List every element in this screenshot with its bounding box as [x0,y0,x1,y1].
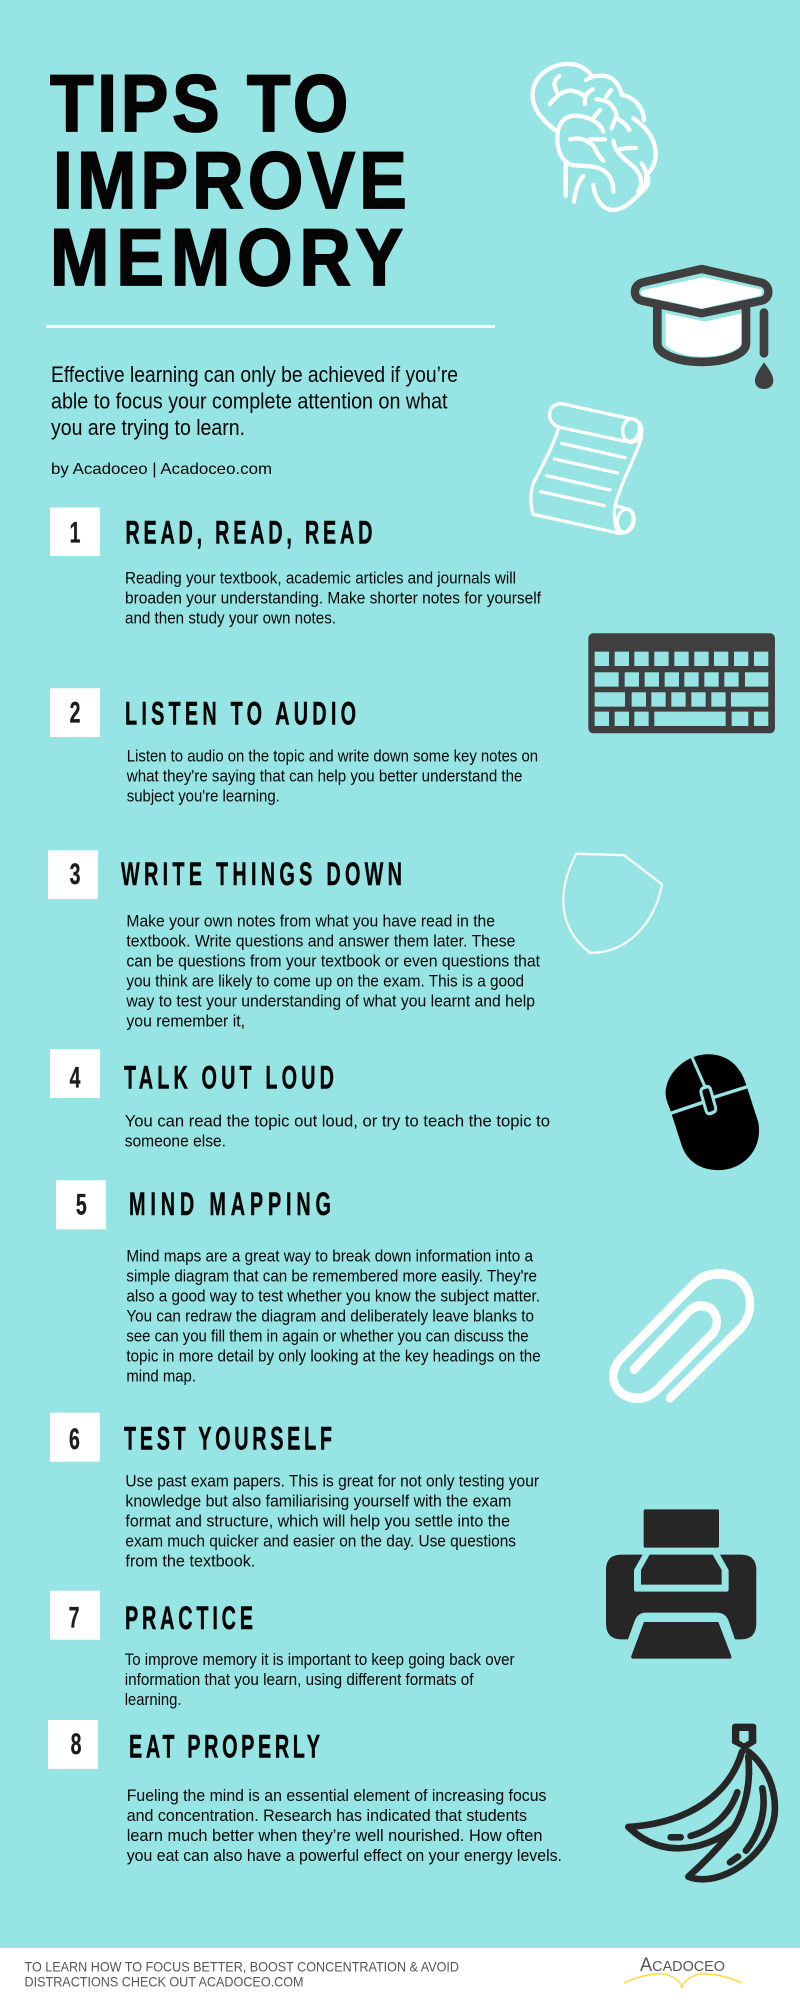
tip 8: eat properly: Fueling the mind is an essential element of increasing focus [127,1786,546,1805]
tip 4: talk out loud: You can read the topic out loud, or try to teach the topic to [125,1112,550,1131]
intro text: able to focus your complete attention on what [51,388,448,414]
tip 2: listen to audio [50,688,538,806]
tip 3: write things down: you think are likely to come up on the exam. This is a good [126,971,524,990]
tip 7: practice: learning. [125,1690,182,1709]
tip 1: read, read, read: broaden your understanding. Make shorter notes for yourself [125,588,541,607]
footer text: DISTRACTIONS CHECK OUT ACADOCEO.COM [24,1974,304,1990]
tip 6: test yourself: format and structure, which will help you settle into the [125,1512,510,1531]
tip 7: practice: To improve memory it is important to keep going back over [125,1650,515,1669]
tip 5: mind mapping: see can you fill them in again or whether you can discuss the [126,1327,529,1346]
tip 6: test yourself: exam much quicker and easier on the day. Use questions [125,1532,516,1551]
tip 1: read, read, read: 1 [70,517,80,550]
tip 4: talk out loud: 4 [70,1062,80,1095]
tip 1: read, read, read: Reading your textbook, academic articles and journals will [125,568,516,587]
tip 5: mind mapping [56,1180,541,1386]
tip 2: listen to audio: Listen to audio on the topic and write down some key notes on [127,747,538,766]
icon: bananas [628,1724,775,1879]
tip 8: eat properly: learn much better when they’re well nourished. How often [127,1826,542,1845]
icon: shield outline [563,854,662,953]
byline: by Acadoceo | Acadoceo.com [51,461,272,478]
tip 5: mind mapping: also a good way to test whether you know the subject matter. [126,1287,540,1306]
footer band [0,1948,800,2000]
tip 3: write things down: 3 [70,858,80,891]
icon: graduation cap [635,269,773,389]
tip 6: test yourself [50,1413,539,1571]
tip 3: write things down [48,850,540,1030]
tip 8: eat properly [48,1720,562,1865]
title: TIPS TO [50,59,348,149]
tip 3: write things down: way to test your understanding of what you learnt and help [125,991,535,1010]
intro text: you are trying to learn. [51,415,245,440]
title: IMPROVE [53,136,407,226]
tip 8: eat properly: 8 [71,1728,81,1761]
title: MEMORY [50,213,403,303]
title [50,59,407,303]
tip 2: listen to audio: what they're saying that can help you better understand the [126,767,522,786]
tip 2: listen to audio: 2 [70,697,80,730]
tip 6: test yourself: 6 [69,1423,80,1456]
footer text [24,1959,459,1990]
tip 1: read, read, read [50,508,541,627]
tip 6: test yourself: knowledge but also familiarising yourself with the exam [125,1492,511,1511]
tip 5: mind mapping: MIND MAPPING [129,1186,331,1222]
tip 8: eat properly: you eat can also have a powerful effect on your energy levels. [127,1846,562,1865]
tip 7: practice: PRACTICE [125,1600,253,1636]
tip 7: practice [50,1591,515,1709]
tip 5: mind mapping: simple diagram that can be remembered more easily. They're [126,1267,537,1286]
tip 7: practice: 7 [69,1601,79,1634]
tip 1: read, read, read: and then study your own notes. [125,608,336,627]
tip 8: eat properly: and concentration. Research has indicated that students [127,1806,527,1825]
logo: Acadoceo [624,1955,742,1988]
icon: keyboard [588,633,775,733]
tip 2: listen to audio: subject you're learning. [127,787,280,806]
tip 5: mind mapping: 5 [76,1188,87,1221]
tip 5: mind mapping: topic in more detail by only looking at the key headings on the [126,1347,541,1366]
icon: brain [533,64,656,210]
icon: computer mouse [666,1054,759,1170]
tip 4: talk out loud [50,1049,550,1151]
icon: paperclip [613,1274,750,1398]
tip 3: write things down: Make your own notes from what you have read in the [126,911,495,930]
tip 5: mind mapping: You can redraw the diagram and deliberately leave blanks to [126,1307,534,1326]
icon: paper scroll [531,404,642,534]
intro text [51,362,458,440]
tip 4: talk out loud: TALK OUT LOUD [124,1060,334,1096]
tip 4: talk out loud: someone else. [125,1132,226,1151]
tip 6: test yourself: from the textbook. [125,1552,255,1571]
tip 3: write things down: textbook. Write questions and answer them later. These [126,931,515,950]
tip 8: eat properly: EAT PROPERLY [129,1729,320,1765]
tip 7: practice: information that you learn, using different formats of [125,1670,474,1689]
footer text: TO LEARN HOW TO FOCUS BETTER, BOOST CONCENTRATION & AVOID [24,1959,459,1975]
tip 3: write things down: can be questions from your textbook or even questions that [126,951,540,970]
tip 1: read, read, read: READ, READ, READ [125,514,372,551]
tip 3: write things down: WRITE THINGS DOWN [121,856,402,892]
intro text: Effective learning can only be achieved if you’re [51,362,458,387]
tip 6: test yourself: TEST YOURSELF [124,1420,332,1457]
tip 5: mind mapping: Mind maps are a great way to break down information into a [126,1247,533,1266]
logo: Acadoceo: ACADOCEO [640,1955,725,1976]
tip 6: test yourself: Use past exam papers. This is great for not only testing your [125,1472,539,1491]
tip 3: write things down: you remember it, [126,1011,245,1030]
tip 2: listen to audio: LISTEN TO AUDIO [125,696,356,732]
tip 5: mind mapping: mind map. [126,1367,196,1386]
icon: printer [606,1509,756,1659]
